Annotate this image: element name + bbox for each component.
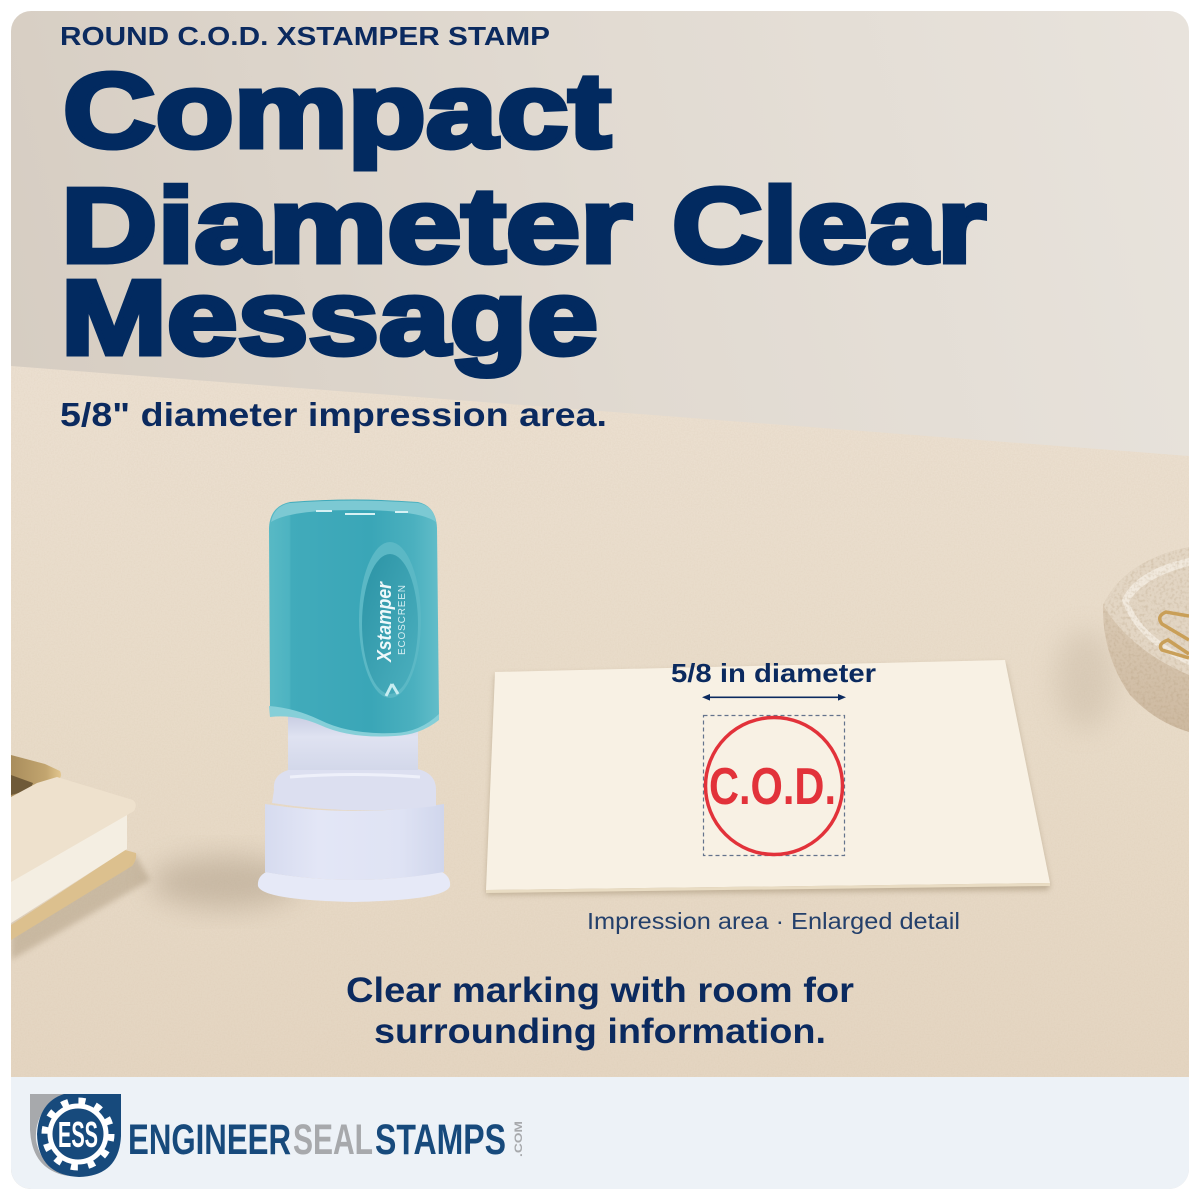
- stamp cap: [269, 500, 439, 735]
- logo .com: .COM: [513, 1121, 525, 1157]
- photo prop: notebook: [11, 755, 150, 960]
- stamp collar: [272, 768, 436, 810]
- footer band: [11, 1077, 1189, 1189]
- stamp product: [258, 500, 450, 902]
- diameter arrow: [702, 694, 846, 701]
- paper card: [486, 660, 1050, 895]
- impression area dashed box: [704, 716, 844, 856]
- bottom message: surrounding information.: [374, 1012, 826, 1051]
- stamp lower body: [265, 804, 444, 880]
- main title: Compact: [63, 52, 611, 170]
- photo prop: bowl with paper clips: [1055, 545, 1190, 735]
- main title: Message: [61, 259, 598, 377]
- logo wordmark: STAMPS: [375, 1116, 506, 1164]
- diameter label: 5/8 in diameter: [671, 658, 876, 688]
- subtitle: 5/8" diameter impression area.: [60, 396, 607, 433]
- impression caption: Impression area · Enlarged detail: [587, 908, 960, 934]
- stamp brand: Xstamper: Xstamper: [374, 581, 396, 663]
- red stamp impression: [706, 718, 842, 854]
- eyebrow heading: ROUND C.O.D. XSTAMPER STAMP: [60, 21, 550, 51]
- stamp flange: [258, 872, 450, 902]
- main title: Clear: [672, 167, 986, 285]
- logo emblem: [30, 1094, 121, 1177]
- main title: [61, 52, 986, 377]
- bottom message: [346, 971, 854, 1051]
- stamp neck: [288, 715, 418, 770]
- main title: Diameter: [61, 167, 632, 285]
- impression text: C.O.D.: [709, 758, 836, 816]
- stamp brand: Ecoscreen: ECOSCREEN: [397, 585, 408, 655]
- photo shadow under stamp: [150, 856, 300, 908]
- logo wordmark: [128, 1116, 506, 1164]
- logo wordmark: SEAL: [293, 1116, 373, 1164]
- bottom message: Clear marking with room for: [346, 971, 854, 1010]
- logo wordmark: ENGINEER: [128, 1116, 291, 1164]
- logo initials: ESS: [58, 1114, 98, 1155]
- stamp oval label: [359, 542, 421, 698]
